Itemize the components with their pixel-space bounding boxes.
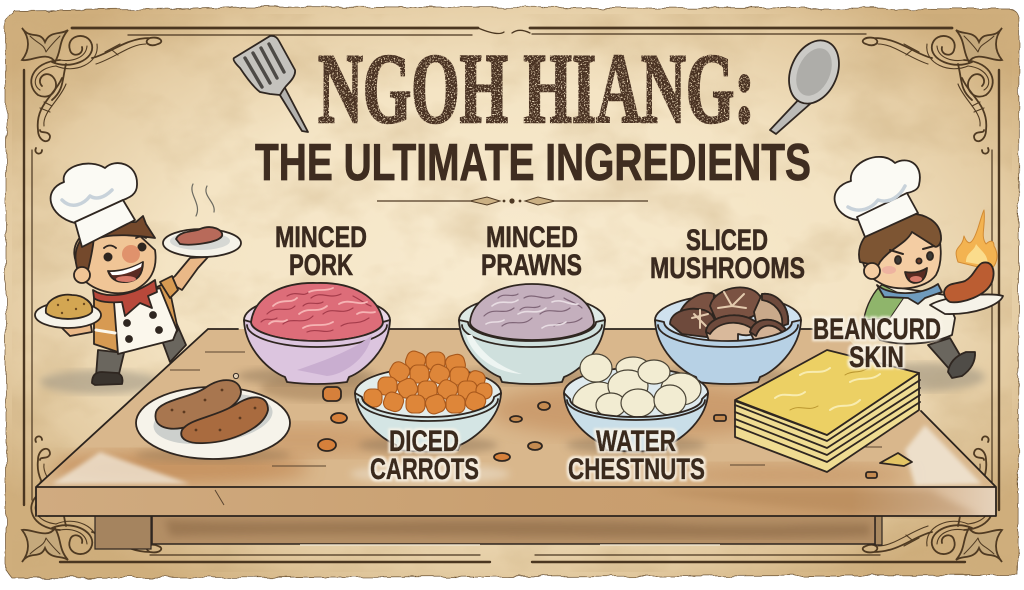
label: beancurd skin: SKIN <box>849 341 904 374</box>
illustration: chef right <box>835 157 1003 391</box>
chestnut slices <box>568 354 701 420</box>
mushroom slices <box>670 287 788 344</box>
chef right flame <box>956 210 997 270</box>
title: NGOH HIANG: <box>318 33 755 144</box>
label: diced carrots: CARROTS <box>370 453 479 486</box>
table top surface <box>36 329 996 487</box>
label: minced pork: PORK <box>289 249 353 282</box>
chef left coat <box>94 282 178 354</box>
label: minced pork <box>275 221 367 282</box>
chef left hat <box>51 163 137 247</box>
corner ornament: top right <box>863 28 1002 154</box>
carrot cubes <box>364 349 492 416</box>
icon: spoon <box>770 32 848 134</box>
corner ornament: bottom right <box>863 436 1002 562</box>
chef right plate with sausage <box>930 262 1003 314</box>
table front face <box>36 487 996 516</box>
food: scattered carrot and crumbs <box>318 387 912 478</box>
label: sliced mushrooms: MUSHROOMS <box>650 252 805 285</box>
label: sliced mushrooms <box>650 224 805 285</box>
chef right ground shadow <box>865 363 985 391</box>
chef right head <box>859 214 941 288</box>
chef left ground shadow <box>40 370 160 394</box>
label: water chestnuts: WATER <box>596 425 676 458</box>
food: water chestnuts bowl <box>564 354 708 454</box>
label: beancurd skin <box>813 313 941 374</box>
corner ornament: bottom left <box>22 436 161 562</box>
label: sliced mushrooms: SLICED <box>686 224 768 257</box>
food: sausages on plate <box>135 373 291 463</box>
label: beancurd skin: BEANCURD <box>813 313 941 346</box>
label: minced pork: MINCED <box>275 221 367 254</box>
table lower beam <box>152 515 875 544</box>
food: diced carrots bowl <box>355 349 501 454</box>
label: water chestnuts: CHESTNUTS <box>568 453 705 486</box>
chef left raised plate with meat <box>163 227 241 257</box>
label: diced carrots: DICED <box>389 425 459 458</box>
food: beancurd skin stack <box>735 350 920 472</box>
subtitle: THE ULTIMATE INGREDIENTS <box>255 134 811 192</box>
table legs <box>95 515 151 549</box>
chef right body <box>864 285 955 344</box>
chef left legs and boots <box>92 322 186 385</box>
chef right hat <box>835 157 920 237</box>
corner ornament: top left <box>22 28 161 154</box>
chef left red scarf <box>93 280 157 316</box>
title divider ornament <box>377 197 648 205</box>
chef right blue scarf <box>877 284 942 304</box>
chef left steam <box>192 184 214 216</box>
chef right leg and boot <box>928 338 975 378</box>
panel: wooden table <box>36 329 996 549</box>
food: sliced mushrooms bowl <box>650 287 801 385</box>
chef left head <box>74 216 156 293</box>
chef left raised arm <box>168 257 208 290</box>
food: minced pork bowl <box>237 283 390 385</box>
label: diced carrots <box>370 425 479 486</box>
food: minced prawns bowl <box>456 284 605 385</box>
chef left hand and lower plate with fried mince <box>35 295 101 336</box>
label: minced prawns: MINCED <box>486 221 578 254</box>
illustration: chef left <box>35 163 241 394</box>
label: minced prawns: PRAWNS <box>481 249 582 282</box>
icon: spatula <box>234 36 308 132</box>
label: minced prawns <box>481 221 582 282</box>
label: water chestnuts <box>568 425 705 486</box>
